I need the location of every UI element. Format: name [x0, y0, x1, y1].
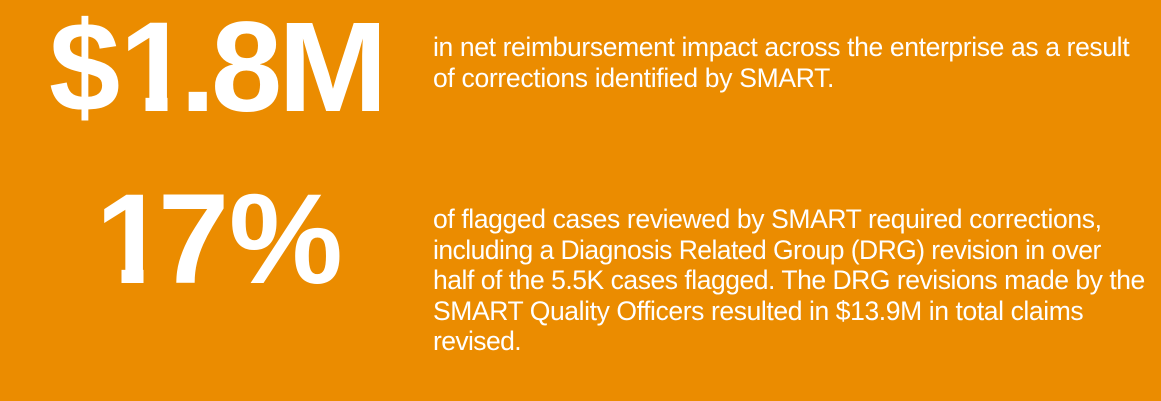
text: net reimbursement description: in net reimbursement impact across the enterprise as a result [433, 32, 1129, 62]
stat: $1.8M: 8 [211, 0, 282, 139]
text: net reimbursement description [433, 32, 1130, 92]
text: net reimbursement description: of corrections identified by SMART. [433, 62, 834, 92]
text: flagged cases description: SMART Quality Officers resulted in $13.9M in total claims [433, 296, 1083, 326]
stat: $1.8M [49, 0, 388, 139]
stat: 17% [104, 168, 343, 311]
stat: 17%: 7 [158, 168, 229, 311]
text: flagged cases description: including a Diagnosis Related Group (DRG) revision in over [433, 234, 1101, 264]
text: flagged cases description: of flagged cases reviewed by SMART required corrections, [433, 204, 1102, 234]
stat: 17%: % [229, 168, 343, 311]
stat: $1.8M: $ [49, 0, 120, 139]
stat: 17%: 1 [96, 168, 167, 311]
text: flagged cases description [433, 204, 1145, 356]
text: flagged cases description: half of the 5.5K cases flagged. The DRG revisions made by the [433, 265, 1145, 295]
stat: $1.8M: M [278, 0, 388, 139]
stat: $1.8M: . [180, 0, 216, 139]
stat: $1.8M: 1 [120, 0, 191, 139]
text: flagged cases description: revised. [433, 326, 521, 356]
